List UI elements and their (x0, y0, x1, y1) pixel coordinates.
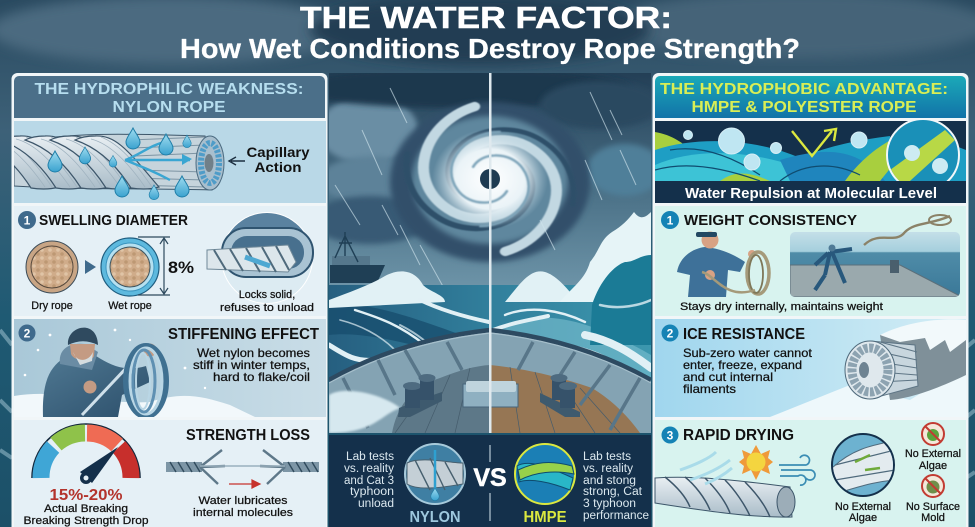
nylon text: and Cat 3 (344, 475, 394, 487)
HMPE label: HMPE (524, 509, 567, 526)
panel: hydrophobic advantage (HMPE & polyester) (652, 73, 968, 527)
snow cap (880, 319, 966, 352)
panel heading: HMPE & POLYESTER ROPE (692, 99, 917, 116)
no algae label (905, 448, 961, 472)
HMPE text: performance (583, 510, 649, 522)
panel heading: THE HYDROPHILIC WEAKNESS: (34, 81, 304, 98)
heading: WEIGHT CONSISTENCY (684, 212, 857, 229)
rope sheath (880, 334, 966, 400)
description: enter, freeze, expand (683, 358, 802, 372)
number badge 2: 2 (24, 326, 31, 340)
wet rope cross-section (101, 238, 159, 296)
icon: no mold (922, 475, 944, 497)
lubrication caption: Water lubricates (198, 495, 288, 507)
panel: nylon vs HMPE comparison (329, 435, 651, 527)
heading: SWELLING DIAMETER (39, 212, 188, 229)
description (683, 346, 813, 396)
deck throwing scene (790, 215, 960, 297)
title (180, 0, 800, 64)
panel heading (655, 76, 966, 118)
water droplets (684, 128, 867, 170)
panel heading (14, 76, 325, 118)
swelling percent: 8% (168, 258, 194, 277)
hero: molecular water repulsion (655, 119, 966, 203)
description: and cut internal (683, 370, 773, 384)
nylon label: NYLON (410, 509, 460, 526)
dry rope label: Dry rope (31, 300, 73, 312)
HMPE text: and stong (583, 475, 636, 487)
description: Sub-zero water cannot (683, 346, 813, 360)
description: Wet nylon becomes (197, 346, 310, 360)
heading: STRENGTH LOSS (186, 427, 310, 444)
ship bow, bulwark and deck (329, 330, 651, 433)
icon: sun (739, 445, 773, 480)
strength drop value: 15%-20% (50, 487, 122, 504)
panel heading: NYLON ROPE (112, 99, 226, 116)
lubrication caption: internal molecules (193, 507, 293, 519)
rope coil (747, 252, 769, 294)
stormy sea and waves (329, 212, 651, 382)
HMPE text: vs. reality (583, 463, 633, 475)
section 2: ice resistance (655, 319, 966, 417)
no mold label (906, 501, 960, 524)
rope (655, 477, 795, 517)
heading: ICE RESISTANCE (683, 326, 805, 343)
section 3: strength loss (14, 420, 326, 527)
man holding rope (677, 232, 756, 297)
no algae label: Algae (919, 460, 947, 472)
number badge 1 (661, 211, 679, 229)
description: hard to flake/coil (213, 370, 310, 384)
panel: hydrophilic weakness (nylon) (0, 73, 328, 527)
frozen rope coil (126, 346, 166, 416)
swelling arrow (85, 260, 96, 274)
number badge 1: 1 (667, 214, 674, 228)
reflection arrow (792, 129, 836, 156)
strength drop caption: Breaking Strength Drop (24, 515, 148, 527)
dry rope cross-section (26, 241, 78, 293)
no mold label: No Surface (906, 501, 960, 513)
snow ground (770, 375, 966, 417)
filament end (845, 341, 895, 399)
HMPE text: Lab tests (583, 451, 631, 463)
heading: STIFFENING EFFECT (168, 326, 320, 343)
number badge 2 (662, 324, 678, 342)
nylon text: Lab tests (346, 451, 394, 463)
icon: nylon rope (405, 444, 465, 504)
lubrication caption (193, 495, 293, 519)
HMPE text: strong, Cat (583, 486, 643, 498)
arrow inside rope (182, 154, 192, 165)
number badge 2 (18, 324, 36, 342)
nylon text (344, 451, 394, 510)
icon: broken rope (166, 450, 319, 484)
capillary arrow (229, 157, 245, 165)
nylon text: unload (358, 498, 394, 510)
strength drop caption (24, 503, 148, 527)
no mold label: Mold (921, 512, 945, 524)
hero: capillary action rope (0, 121, 326, 203)
section 3: rapid drying (655, 420, 966, 527)
vs divider (489, 445, 491, 521)
man with frozen rope (43, 328, 157, 417)
filament bundle (870, 341, 918, 399)
description: stiff in winter temps, (193, 358, 310, 372)
section 1: weight consistency (655, 206, 966, 316)
number badge 3 (662, 426, 678, 444)
nylon text: vs. reality (344, 463, 394, 475)
panel heading: THE HYDROPHOBIC ADVANTAGE: (660, 81, 948, 98)
dimension arrow (138, 237, 170, 295)
title line 2: How Wet Conditions Destroy Rope Strength? (180, 33, 800, 64)
title line 1: THE WATER FACTOR: (300, 0, 672, 35)
panel: central storm scene (329, 73, 651, 433)
hero: capillary action rope: Action (254, 159, 302, 175)
section 2: stiffening effect (14, 319, 326, 417)
magnified fibre inset (886, 120, 960, 181)
no algae caption: Algae (849, 512, 877, 524)
number badge 2: 2 (667, 326, 674, 340)
strength gauge (32, 424, 140, 484)
distant ship (330, 232, 385, 283)
icon: rope locked in eye (207, 212, 314, 304)
no algae caption (835, 501, 891, 524)
heading: RAPID DRYING (683, 427, 794, 444)
number badge 1 (18, 211, 36, 229)
strength drop caption: Actual Breaking (44, 503, 128, 515)
drying streaks (680, 452, 732, 484)
VS label: VS (473, 464, 507, 492)
red arrow (229, 480, 260, 488)
description: filaments (683, 382, 736, 396)
icon: no algae (922, 423, 944, 445)
centre divider (489, 73, 492, 433)
no algae caption: No External (835, 501, 891, 513)
HMPE text: 3 typhoon (583, 498, 636, 510)
description (193, 346, 310, 384)
number badge 1: 1 (24, 214, 31, 228)
nylon text: typhoon (350, 486, 394, 498)
hero caption: Water Repulsion at Molecular Level (685, 185, 937, 202)
storm sky and typhoon (329, 73, 651, 285)
caption: Stays dry internally, maintains weight (680, 301, 884, 313)
wet rope label: Wet rope (108, 300, 152, 312)
no algae label: No External (905, 448, 961, 460)
spiral arms (408, 101, 572, 257)
HMPE text (583, 451, 649, 522)
section 1: swelling diameter (14, 206, 326, 316)
number badge 3: 3 (667, 428, 674, 442)
icon: HMPE rope (515, 444, 575, 504)
lock caption line 2: refuses to unload (220, 302, 314, 314)
capillary label: Capillary (246, 144, 310, 160)
magnified rope with no algae (830, 434, 900, 496)
snow drift (14, 394, 255, 417)
lock caption: Locks solid, (239, 289, 295, 301)
icon: wind (779, 455, 815, 485)
